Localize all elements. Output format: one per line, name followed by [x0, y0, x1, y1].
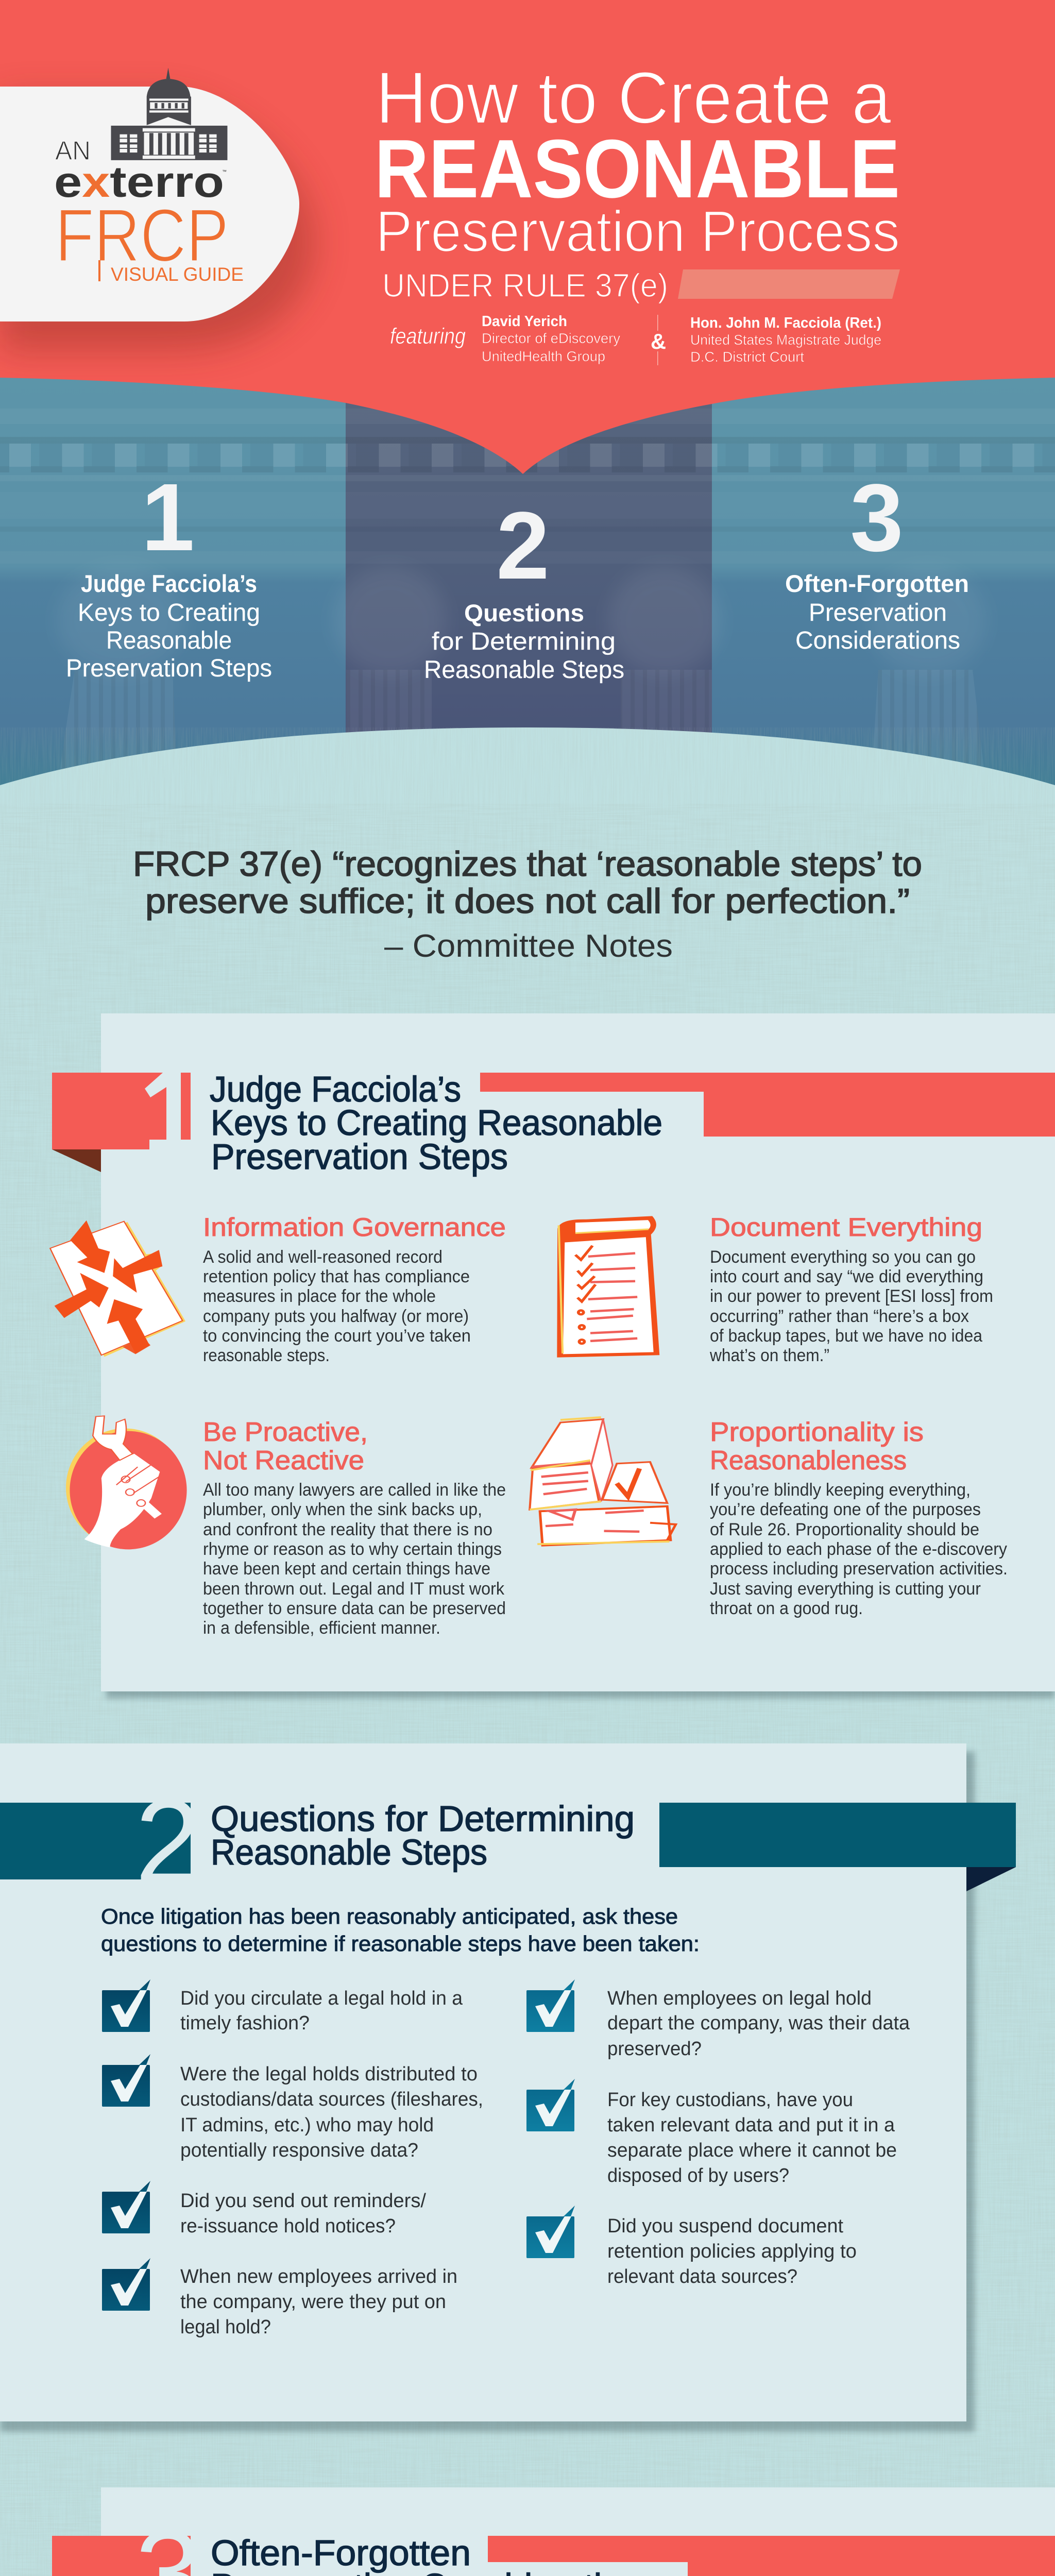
- title: Preservation Process: [376, 199, 900, 264]
- logo text: exterro: ™: [222, 169, 227, 174]
- section 2 heading: Questions for Determining: [211, 1799, 635, 1839]
- ampersand divider: [650, 315, 666, 365]
- paper arc top edge: [0, 727, 1055, 804]
- courthouse architecture: [0, 409, 1055, 791]
- icon: hand holding wrench: [66, 1416, 187, 1549]
- item text: All too many lawyers are called in like the: [203, 1480, 506, 1500]
- question 4: the company, were they put on: [180, 2291, 446, 2313]
- question 6: taken relevant data and put it in a: [607, 2114, 895, 2136]
- teaser text 3: Considerations: [795, 627, 960, 654]
- card shadow: [0, 1752, 975, 2432]
- panel: section 3 considerations: [52, 2487, 1055, 2576]
- pull quote: committee notes: – Committee Notes: [384, 928, 673, 964]
- title: How to Create a: [376, 57, 891, 139]
- title: [375, 57, 900, 264]
- question 1: [102, 1979, 463, 2034]
- teaser text 2: [424, 599, 624, 684]
- section 1 heading: Keys to Creating Reasonable: [211, 1103, 662, 1143]
- featuring credits: [390, 313, 881, 365]
- number 3: 3: [850, 465, 904, 571]
- item text: Information Governance: [203, 1213, 506, 1242]
- item text: you’re defeating one of the purposes: [710, 1500, 981, 1519]
- icon: document with arrows: [50, 1221, 185, 1357]
- question 3: Did you send out reminders/: [180, 2190, 426, 2212]
- section 2 intro: Once litigation has been reasonably anticipated, ask these: [101, 1904, 678, 1928]
- center highlighted column: [346, 371, 712, 737]
- icon: capitol building: [111, 68, 227, 160]
- item text: If you’re blindly keeping everything,: [710, 1480, 971, 1500]
- coral header: [0, 68, 1055, 474]
- teaser text 1: Reasonable: [106, 627, 232, 654]
- question 3: [102, 2181, 426, 2237]
- logo panel shadow: [0, 98, 314, 350]
- panel: section 2 questions: [0, 1743, 1016, 2432]
- section 1 heading: Preservation Steps: [211, 1137, 508, 1177]
- card: [101, 1013, 1055, 1691]
- item text: to convincing the court you’ve taken: [203, 1326, 471, 1346]
- question 6: For key custodians, have you: [607, 2089, 853, 2111]
- question 2: [102, 2054, 483, 2161]
- section 2 heading: [211, 1799, 635, 1872]
- logo panel: [0, 68, 299, 321]
- item: proportionality: [530, 1417, 1008, 1618]
- item text: what’s on them.”: [709, 1346, 829, 1365]
- card shadow: [106, 1025, 1055, 1698]
- teaser text 3: [785, 570, 969, 654]
- card: [0, 1743, 966, 2421]
- item text: together to ensure data can be preserved: [203, 1599, 506, 1618]
- question 1: timely fashion?: [180, 2012, 310, 2034]
- David Yerich credit: Director of eDiscovery: [482, 330, 620, 346]
- question 7: [526, 2206, 857, 2287]
- question 7: Did you suspend document: [607, 2215, 843, 2237]
- section 1 teaser: [66, 464, 272, 682]
- item text: in a defensible, efficient manner.: [203, 1618, 440, 1638]
- logo text: AN: AN: [55, 136, 91, 166]
- icon: stacked papers: [530, 1417, 676, 1546]
- teaser text 1: Preservation Steps: [66, 655, 272, 682]
- icon: checklist notepad: [557, 1216, 659, 1358]
- question 7: retention policies applying to: [607, 2241, 857, 2262]
- item text: reasonable steps.: [203, 1346, 330, 1365]
- logo text: FRCP: FRCP: [55, 193, 229, 277]
- question 7: relevant data sources?: [607, 2266, 797, 2287]
- white rounded panel: [0, 87, 299, 321]
- subtitle: under rule 37(e): UNDER RULE 37(e): [382, 267, 668, 304]
- question 5: [526, 1979, 910, 2060]
- question 6: separate place where it cannot be: [607, 2140, 897, 2161]
- subtitle: under rule 37(e): [382, 267, 900, 304]
- question 2: Were the legal holds distributed to: [180, 2063, 478, 2085]
- pull quote: committee notes: preserve suffice; it does not call for perfection.”: [145, 882, 910, 921]
- item text: rhyme or reason as to why certain things: [203, 1539, 502, 1559]
- item text: retention policy that has compliance: [203, 1267, 470, 1286]
- item text: Document Everything: [710, 1213, 982, 1242]
- hero band: courthouse columns photo with three sections: [0, 371, 1055, 791]
- section 3 heading: [211, 2533, 659, 2576]
- question 2: potentially responsive data?: [180, 2140, 418, 2161]
- item text: process including preservation activities.: [710, 1559, 1008, 1579]
- David Yerich credit: David Yerich: [482, 313, 567, 330]
- teaser text 1: Keys to Creating: [78, 599, 260, 626]
- item text: of Rule 26. Proportionality should be: [710, 1520, 979, 1539]
- question 4: [102, 2258, 457, 2338]
- question 2: IT admins, etc.) who may hold: [180, 2114, 434, 2136]
- teaser text 3: Often-Forgotten: [785, 570, 969, 597]
- teaser text 2: Questions: [464, 599, 584, 626]
- item text: in our power to prevent [ESI loss] from: [710, 1286, 993, 1306]
- teaser text 1: [66, 570, 272, 682]
- item text: throat on a good rug.: [710, 1599, 863, 1618]
- number 2: 2: [496, 493, 550, 599]
- section 1 heading: Judge Facciola’s: [210, 1069, 461, 1109]
- item text: [710, 1417, 1008, 1618]
- section 2 intro: questions to determine if reasonable steps have been taken:: [101, 1931, 700, 1956]
- pull quote: committee notes: FRCP 37(e) “recognizes that ‘reasonable steps’ to: [133, 844, 922, 884]
- card: [101, 2487, 1055, 2576]
- item text: [203, 1213, 506, 1365]
- logo text: visual guide: VISUAL GUIDE: [111, 264, 244, 285]
- item text: and confront the reality that there is no: [203, 1520, 492, 1539]
- John Facciola credit: Hon. John M. Facciola (Ret.): [690, 315, 881, 331]
- featuring label: featuring: [390, 324, 466, 349]
- John Facciola credit: D.C. District Court: [690, 349, 804, 365]
- pull quote: committee notes: [133, 844, 922, 964]
- title: REASONABLE: [375, 123, 900, 215]
- item: be proactive: [66, 1416, 506, 1638]
- question 4: When new employees arrived in: [180, 2266, 457, 2287]
- item text: Just saving everything is cutting your: [710, 1579, 981, 1599]
- item text: [203, 1417, 506, 1638]
- question 3: re-issuance hold notices?: [180, 2215, 396, 2237]
- teaser text 2: Reasonable Steps: [424, 656, 624, 684]
- item text: A solid and well-reasoned record: [203, 1247, 443, 1267]
- question 6: [526, 2079, 897, 2187]
- section 2 ribbon: 2: [135, 1775, 201, 1908]
- item text: measures in place for the whole: [203, 1286, 436, 1306]
- question 4: legal hold?: [180, 2316, 271, 2338]
- section 2 ribbon: [0, 1803, 1016, 1891]
- teaser text 1: Judge Facciola’s: [81, 570, 257, 597]
- item text: have been kept and certain things have: [203, 1559, 490, 1579]
- section 2 teaser: [424, 493, 624, 684]
- item text: into court and say “we did everything: [710, 1267, 983, 1286]
- paper linen background: [0, 721, 1055, 2576]
- section 3 teaser: [785, 465, 969, 654]
- section 1 heading: [210, 1069, 662, 1177]
- item text: Proportionality is: [710, 1417, 924, 1447]
- David Yerich credit: [482, 313, 620, 364]
- item text: Document everything so you can go: [710, 1247, 976, 1267]
- section 3 ribbon: [52, 2536, 1055, 2576]
- question 2: custodians/data sources (fileshares,: [180, 2089, 483, 2110]
- item text: Not Reactive: [203, 1446, 364, 1476]
- item text: occurring” rather than “here’s a box: [710, 1307, 969, 1326]
- section 3 heading: Often-Forgotten: [211, 2533, 471, 2573]
- card shadow: [108, 2499, 1055, 2576]
- question 5: depart the company, was their data: [607, 2012, 910, 2034]
- question 5: preserved?: [607, 2038, 702, 2060]
- teaser text 3: Preservation: [809, 599, 947, 626]
- section 2 intro: [101, 1904, 700, 1956]
- item text: been thrown out. Legal and IT must work: [203, 1579, 505, 1599]
- item text: [709, 1213, 993, 1365]
- logo text: exterro: exterro: [54, 158, 224, 206]
- section 1 ribbon: [52, 1073, 1055, 1172]
- item text: Reasonableness: [710, 1446, 907, 1476]
- hero photo tint: [0, 371, 1055, 791]
- item text: company puts you halfway (or more): [203, 1307, 469, 1326]
- number 1: 1: [141, 464, 195, 571]
- John Facciola credit: [690, 315, 881, 365]
- item: information governance: [50, 1213, 506, 1365]
- ampersand divider: &: [651, 329, 666, 353]
- item: document everything: [557, 1213, 993, 1365]
- item text: of backup tapes, but we have no idea: [710, 1326, 982, 1346]
- John Facciola credit: United States Magistrate Judge: [690, 332, 881, 348]
- question 1: Did you circulate a legal hold in a: [180, 1988, 463, 2009]
- question 5: When employees on legal hold: [607, 1988, 872, 2009]
- item text: Be Proactive,: [203, 1417, 368, 1447]
- David Yerich credit: UnitedHealth Group: [482, 348, 605, 364]
- item text: plumber, only when the sink backs up,: [203, 1500, 482, 1519]
- question 6: disposed of by users?: [607, 2165, 789, 2187]
- item text: applied to each phase of the e-discovery: [710, 1539, 1007, 1559]
- teaser text 2: for Determining: [432, 628, 616, 655]
- panel: section 1 keys: [50, 1013, 1055, 1698]
- section 2 heading: Reasonable Steps: [211, 1832, 487, 1872]
